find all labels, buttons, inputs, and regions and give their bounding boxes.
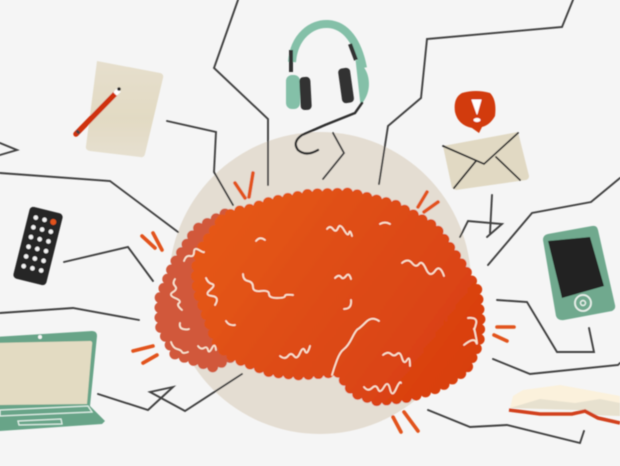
background circle (169, 132, 471, 434)
icon: open book (509, 385, 620, 423)
icon: envelope (443, 132, 529, 190)
burst marks (133, 173, 514, 432)
icon: alert bubble (455, 91, 495, 133)
back lobe (160, 214, 240, 367)
icon: smartphone (543, 226, 615, 320)
brain folds (171, 222, 477, 394)
icon: remote control (13, 206, 63, 286)
icon: headphones (286, 24, 367, 154)
front lobe (196, 193, 480, 401)
icon: laptop (0, 331, 105, 431)
brain (160, 193, 480, 401)
icon: paper and pencil (76, 61, 163, 157)
